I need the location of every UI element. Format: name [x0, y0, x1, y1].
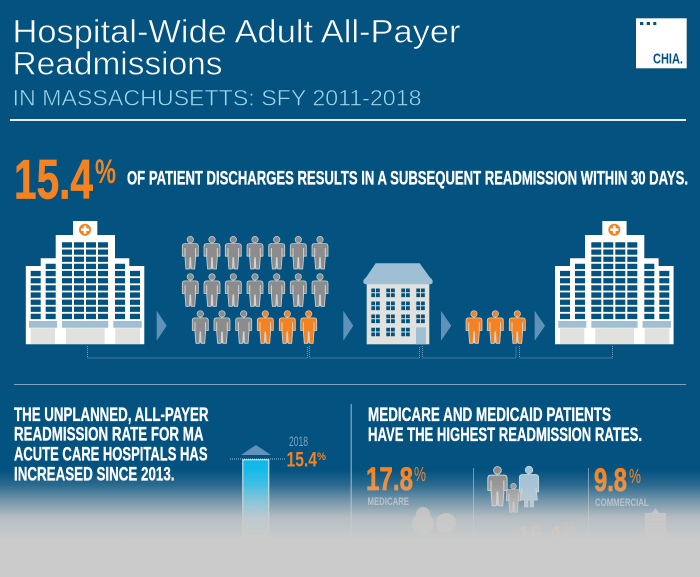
- arrow: patients to post-acute building: [343, 311, 353, 341]
- stat: Medicare: 17.8: [366, 461, 413, 497]
- icon: Medicaid family: [488, 466, 539, 512]
- label: 2018 value: [286, 433, 326, 472]
- rate trend text: READMISSION RATE FOR MA: [14, 423, 204, 445]
- icon: discharging hospital: [26, 221, 144, 344]
- icon: readmitting hospital: [555, 221, 674, 344]
- arrow: hospital to patients: [157, 311, 167, 341]
- label: 2018 value: 2018: [289, 433, 308, 449]
- title: [12, 14, 461, 81]
- icon: post-acute care building: [363, 263, 433, 344]
- panel: rates by payer: [366, 404, 666, 548]
- rate trend text: [14, 404, 208, 486]
- label: 2018 value: %: [317, 451, 326, 463]
- bar chart: 2018 rate: [230, 445, 285, 560]
- bottom fade overlay: [0, 470, 700, 577]
- arrow: patients to readmitting hospital: [535, 311, 545, 341]
- headline statistic: 15.4: [14, 148, 93, 210]
- title: Readmissions: [12, 45, 222, 81]
- icon: commercial building: [645, 508, 666, 545]
- logo: CHIA: [636, 18, 687, 68]
- arrow: building to readmitted patients: [441, 311, 451, 341]
- icon: Medicare seniors: [412, 507, 456, 535]
- rate trend text: ACUTE CARE HOSPITALS HAS: [14, 444, 208, 466]
- stat: Commercial: COMMERCIAL: [595, 497, 649, 509]
- stat: Medicare: MEDICARE: [368, 496, 409, 508]
- subtitle: IN MASSACHUSETTS: SFY 2011-2018: [12, 86, 422, 111]
- stat: Medicaid: 16.4: [518, 521, 562, 548]
- title: Hospital-Wide Adult All-Payer: [12, 14, 461, 50]
- payer heading: [368, 404, 642, 446]
- readmitted patients: [466, 311, 525, 343]
- patient grid: 21 people, 3 readmitted: [182, 236, 328, 343]
- stat: Commercial: [594, 462, 649, 509]
- stat: Commercial: %: [629, 466, 641, 488]
- headline statistic: %: [95, 153, 116, 191]
- rate trend text: THE UNPLANNED, ALL-PAYER: [14, 404, 208, 426]
- stat: Medicaid: %: [563, 519, 575, 539]
- stat: Commercial: 9.8: [594, 462, 627, 498]
- dotted connector lines: [88, 346, 612, 358]
- stat: Medicare: %: [414, 464, 426, 486]
- panel: rate trend: [14, 404, 326, 560]
- label: 2018 value: 15.4: [286, 449, 317, 472]
- rate trend text: INCREASED SINCE 2013.: [14, 464, 174, 486]
- logo: CHIA: CHIA.: [653, 50, 683, 68]
